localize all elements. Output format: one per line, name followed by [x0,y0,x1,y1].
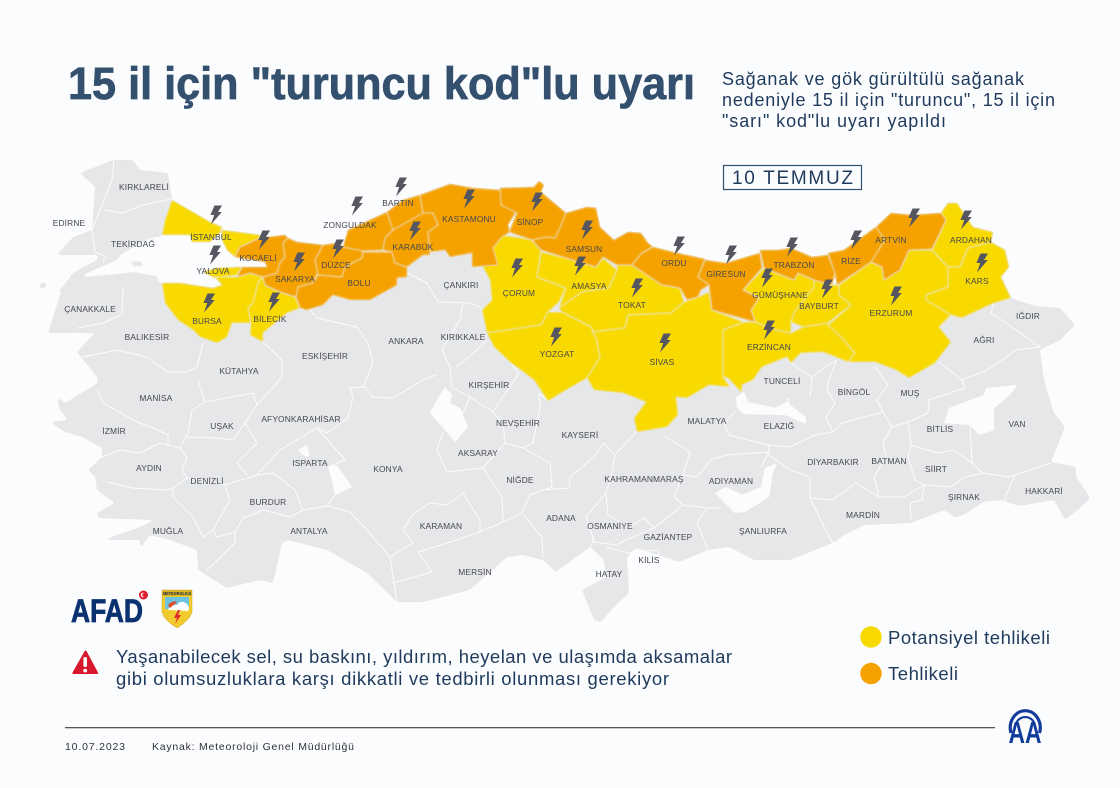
province labels: ÇORUM [503,288,535,298]
warning text [116,646,732,689]
province labels: SİNOP [517,217,544,227]
province labels: ORDU [661,258,687,268]
province labels: TUNCELİ [764,376,800,386]
province labels: KASTAMONU [442,214,496,224]
province labels: GAZİANTEP [644,532,693,542]
province labels: ÇANAKKALE [64,304,116,314]
orange provinces: tehlikeli [235,181,946,322]
province labels: MARDİN [846,510,880,520]
province labels: HATAY [596,569,623,579]
province labels: ESKİŞEHİR [302,351,348,361]
province labels: ÇANKIRI [443,280,479,290]
province labels: DÜZCE [321,260,351,270]
province labels: İZMİR [102,426,126,436]
province labels: BURSA [192,316,222,326]
province labels: YOZGAT [540,349,574,359]
province labels: BOLU [347,278,371,288]
map of Turkey [39,160,1090,622]
province labels: TEKİRDAĞ [111,239,155,249]
logo: Meteoroloji shield: METEOROLOJİ [163,590,191,596]
footer date: 10.07.2023 [65,741,125,753]
logo: Meteoroloji shield [162,590,192,628]
province labels: BİLECİK [253,314,287,324]
province labels: KOCAELİ [239,253,277,263]
province labels: KIRKLARELİ [119,182,169,192]
province labels: MUĞLA [153,526,184,536]
province labels: SAMSUN [566,244,602,254]
province labels: DİYARBAKIR [807,457,859,467]
gray land silhouette [39,160,1090,622]
province labels: GİRESUN [706,269,746,279]
province labels: BALIKESİR [125,332,169,342]
province labels: OSMANİYE [587,521,633,531]
province labels: DENİZLİ [190,476,224,486]
province labels: KAYSERİ [562,430,598,440]
province labels: KARS [965,276,989,286]
footer source: Kaynak: Meteoroloji Genel Müdürlüğü [152,741,354,753]
legend [860,626,1050,684]
province labels: HAKKARİ [1025,486,1063,496]
province borders in gray zone [78,160,1051,602]
province labels: ARTVİN [875,235,907,245]
province labels: KONYA [373,464,403,474]
province labels: ANTALYA [290,526,328,536]
legend: Tehlikeli [888,663,958,684]
province labels: KIRŞEHİR [469,380,509,390]
logo: AA: AA [1008,715,1042,750]
province labels: ANKARA [388,336,424,346]
province labels: ŞIRNAK [948,492,980,502]
lightning icons [203,178,988,352]
province labels: KARAMAN [420,521,462,531]
legend: Potansiyel tehlikeli [888,627,1050,648]
province labels: UŞAK [210,421,234,431]
province labels: AFYONKARAHİSAR [261,414,341,424]
province labels: YALOVA [196,266,230,276]
province labels: ELAZIĞ [764,421,794,431]
province labels: MUŞ [900,388,920,398]
province labels: SİİRT [925,464,947,474]
province labels: VAN [1008,419,1026,429]
province labels: NEVŞEHİR [496,418,540,428]
date box: 10 TEMMUZ [732,168,853,189]
province labels: BURDUR [250,497,286,507]
province labels: KİLİS [638,555,660,565]
province labels: KÜTAHYA [219,366,259,376]
province labels: ERZURUM [870,308,912,318]
province labels [53,182,1063,579]
province labels: TOKAT [618,300,646,310]
province labels: AMASYA [571,281,607,291]
province labels: ZONGULDAK [323,220,377,230]
province labels: MALATYA [688,416,727,426]
subtitle: nedeniyle 15 il için "turuncu", 15 il için [722,90,1055,110]
province labels: BİTLİS [927,424,954,434]
province labels: MERSİN [458,567,492,577]
province labels: İSTANBUL [190,232,232,242]
province labels: IĞDIR [1016,311,1040,321]
province labels: KARABÜK [392,242,434,252]
province labels: ADIYAMAN [709,476,753,486]
province labels: BİNGÖL [838,387,870,397]
province labels: BAYBURT [799,301,839,311]
province labels: AĞRI [973,335,995,345]
province labels: SİVAS [650,357,675,367]
subtitle [722,69,1055,131]
logo: AA [1008,711,1042,750]
province labels: ERZİNCAN [747,342,791,352]
province labels: TRABZON [773,260,815,270]
province labels: AKSARAY [458,448,498,458]
province labels: ISPARTA [292,458,328,468]
lakes and dams [298,385,1017,513]
province labels: BARTIN [382,198,414,208]
province labels: BATMAN [871,456,907,466]
province labels: ARDAHAN [950,235,992,245]
province labels: KIRIKKALE [441,332,486,342]
yellow provinces: potansiyel tehlikeli [162,200,1011,432]
icon: warning triangle [72,650,98,674]
province labels: ADANA [546,513,576,523]
province labels: AYDIN [136,463,162,473]
warning text: gibi olumsuzluklara karşı dikkatli ve tedbirli olunması gerekiyor [116,668,669,689]
subtitle: "sarı" kod"lu uyarı yapıldı [722,111,946,131]
province labels: SAKARYA [275,274,315,284]
footer rule [65,727,995,728]
province labels: ŞANLIURFA [739,526,787,536]
subtitle: Sağanak ve gök gürültülü sağanak [722,69,1025,89]
warning text: Yaşanabilecek sel, su baskını, yıldırım, heyelan ve ulaşımda aksamalar [116,646,732,667]
logo: AFAD: AFAD [71,593,143,629]
province labels: GÜMÜŞHANE [752,290,808,300]
province labels: NİĞDE [506,475,534,485]
province labels: KAHRAMANMARAŞ [604,474,684,484]
province labels: EDİRNE [53,218,86,228]
province labels: MANİSA [139,393,173,403]
title: 15 il için "turuncu kod"lu uyarı [68,58,695,109]
province labels: RİZE [841,256,861,266]
